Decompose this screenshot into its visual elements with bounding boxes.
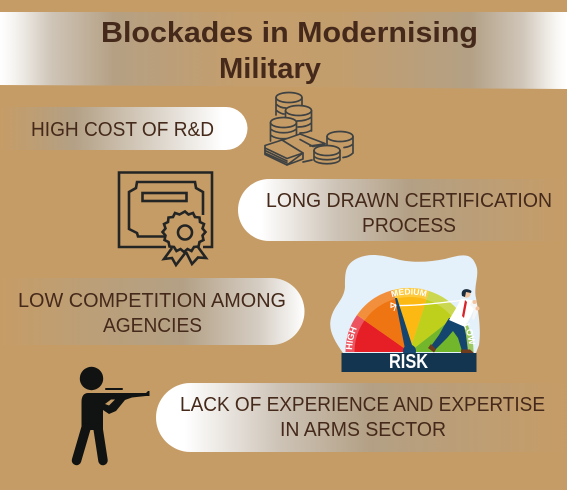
gauge outer band <box>345 288 474 352</box>
icon: risk gauge <box>330 255 480 373</box>
panel: low competition among agencies <box>0 278 304 345</box>
icon: coins and banknotes <box>265 92 353 165</box>
icon: rifle shooter <box>76 367 150 460</box>
gauge needle <box>395 298 416 358</box>
panel: low competition among agencies: LOW COMPETITION AMONG <box>18 290 286 312</box>
title banner <box>0 12 567 89</box>
panel: lack of experience and expertise <box>156 383 567 452</box>
title <box>101 17 478 85</box>
panel: lack of experience and expertise: IN ARMS SECTOR <box>280 419 446 441</box>
gauge title: RISK <box>389 351 428 373</box>
gauge labels: MEDIUM <box>391 288 427 297</box>
title: Blockades in Modernising <box>101 17 478 49</box>
gauge labels <box>346 288 476 350</box>
panel: high cost of R&D: HIGH COST OF R&D <box>31 119 214 141</box>
panel: long drawn certification process: PROCESS <box>362 215 456 237</box>
panel: long drawn certification process <box>238 179 567 241</box>
gauge labels: HIGH <box>346 326 357 350</box>
gauge labels: LOW <box>464 323 476 344</box>
panel: low competition among agencies: AGENCIES <box>103 315 202 337</box>
figure pulling the rope <box>428 289 480 353</box>
gauge backdrop <box>330 255 480 353</box>
icon: certificate with seal <box>119 172 212 265</box>
title: Military <box>219 53 321 85</box>
gauge rope <box>396 300 464 306</box>
panel: high cost of R&D <box>0 107 248 150</box>
panel: lack of experience and expertise: LACK OF EXPERIENCE AND EXPERTISE <box>180 394 545 416</box>
panel: long drawn certification process: LONG DRAWN CERTIFICATION <box>266 190 552 212</box>
gauge base bar <box>342 353 476 372</box>
